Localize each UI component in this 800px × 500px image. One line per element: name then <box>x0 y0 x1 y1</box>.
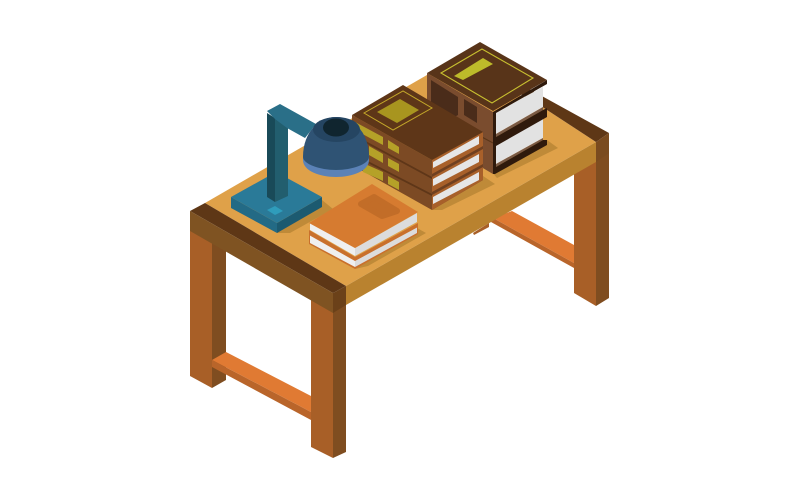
pages <box>433 136 479 168</box>
front right leg <box>311 300 346 458</box>
upper pages left <box>310 223 355 256</box>
top cover <box>427 42 547 111</box>
top book pages <box>496 87 543 134</box>
right corner block <box>596 133 609 162</box>
back right leg <box>574 152 609 306</box>
book stack: dark tall books <box>427 42 547 174</box>
shade dome <box>303 117 369 170</box>
base right side <box>277 197 322 233</box>
spine dividers <box>360 138 432 179</box>
table top <box>190 60 609 313</box>
back hidden leg stub <box>473 223 489 235</box>
cover label <box>377 99 419 123</box>
middle page rim <box>496 107 543 137</box>
button <box>267 206 283 215</box>
front long edge <box>346 142 596 305</box>
base top <box>231 172 322 223</box>
left dark strip <box>190 203 346 293</box>
middle dark band <box>496 108 547 146</box>
lower pages right <box>355 227 417 267</box>
left face <box>427 73 493 174</box>
top surface <box>205 60 596 286</box>
right face <box>432 132 483 210</box>
upper pages right <box>355 213 417 256</box>
base left side <box>231 197 277 233</box>
arm <box>267 104 316 138</box>
top frame <box>441 49 533 103</box>
left front edge <box>190 211 333 313</box>
bottom dark cover <box>493 140 547 174</box>
shade rim <box>303 155 369 177</box>
frame <box>364 91 432 130</box>
top cover <box>352 85 483 160</box>
spine panel large <box>431 80 458 130</box>
spine panel small <box>464 99 477 123</box>
top cover <box>309 184 418 248</box>
bottom page rim <box>496 138 543 167</box>
front left leg <box>190 229 226 388</box>
middle cover <box>309 223 418 261</box>
shade opening <box>323 118 349 136</box>
back stretcher <box>491 211 574 268</box>
bottom book pages <box>496 117 543 164</box>
spine divider <box>480 136 493 143</box>
desk lamp <box>231 104 369 233</box>
post left face <box>267 113 275 202</box>
front stretcher <box>212 352 311 420</box>
shadows on table <box>277 140 558 269</box>
spine edge dark <box>493 112 496 174</box>
cover inset <box>361 197 397 216</box>
orange books <box>309 184 418 269</box>
book stack: three brown books <box>352 85 483 210</box>
top cover underside <box>493 80 547 113</box>
lower pages left <box>310 235 355 267</box>
post right face <box>275 118 288 202</box>
cover strips <box>432 132 483 174</box>
shade cap <box>313 117 360 142</box>
left face <box>352 115 432 210</box>
lower book cover <box>309 227 418 269</box>
back edge strip <box>500 73 609 142</box>
title label <box>454 58 493 80</box>
front corner block <box>333 286 346 313</box>
spine labels <box>355 122 399 190</box>
